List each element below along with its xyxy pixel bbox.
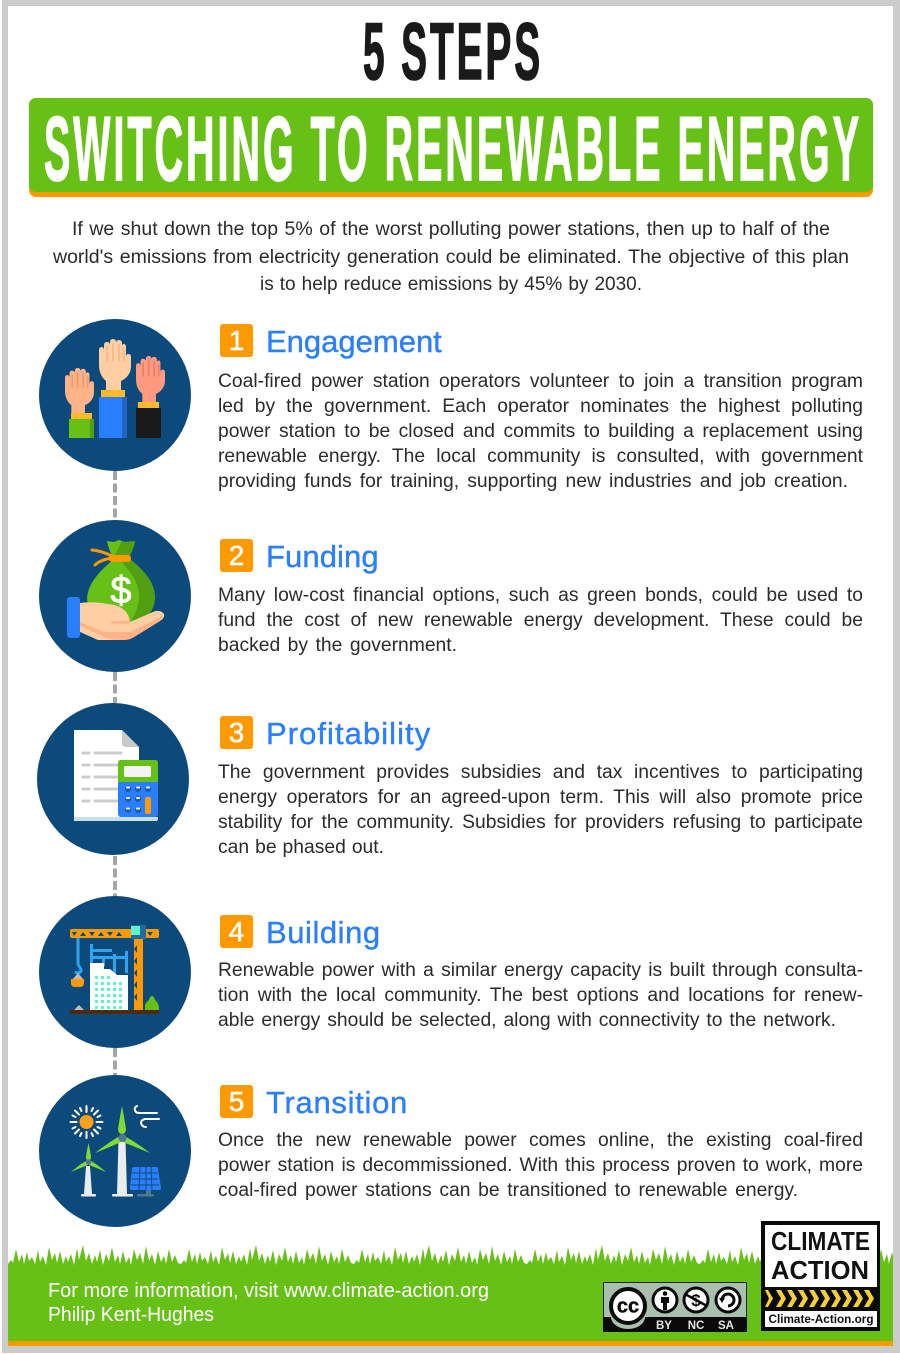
license labels: SA [718,1320,734,1332]
step 5 text: power station is decommissioned. With this process proven to work, more [218,1155,863,1176]
step 2 text [218,585,863,656]
by mark [653,1288,677,1312]
climate action logo: ACTION [771,1255,869,1285]
step 4 text: Renewable power with a similar energy capacity is built through consulta- [218,960,863,981]
icon: wind turbines, sun and solar panel [39,1075,191,1227]
text: 5 STEPS [363,7,543,97]
step 4 badge [220,915,253,948]
footer grass band [8,1245,893,1346]
step 2 heading: Funding [266,539,379,574]
step 1 text: Coal-fired power station operators volunteer to join a transition program [218,371,863,392]
step 1 heading: Engagement [266,324,442,359]
footer text: Philip Kent-Hughes [48,1304,214,1326]
intro text: is to help reduce emissions by 45% by 2030. [260,274,642,295]
icon: document and calculator [37,703,189,855]
icon: money bag on hand [39,520,191,672]
icon: raised hands [39,319,191,471]
step 3 text: energy operators for an agreed-upon term. This will also promote price [218,787,863,808]
panel: step 5 transition [39,1075,863,1227]
cc mark: cc [617,1296,639,1318]
step 5 text: coal-fired power stations can be transitioned to renewable energy. [218,1180,798,1201]
panel: step 1 engagement [39,319,863,492]
icon: construction crane [39,896,191,1048]
panel: step 2 funding [39,520,863,672]
license labels: BY [656,1320,672,1332]
step 1 text: led by the government. Each operator nominates the highest polluting [218,396,863,417]
step 3 text: can be phased out. [218,837,384,858]
footer text [48,1280,489,1326]
climate action logo [761,1221,880,1331]
step 2 badge [220,539,253,572]
cc mark [611,1289,645,1323]
step 5 text [218,1130,863,1201]
nc mark [684,1288,708,1312]
footer text: For more information, visit www.climate-action.org [48,1280,489,1302]
creative commons badge [603,1282,747,1332]
license labels: NC [688,1320,704,1332]
climate action logo: Climate-Action.org [768,1314,874,1326]
step 3 text: stability for the community. Subsidies for providers refusing to participate [218,812,863,833]
step 4 badge: 4 [229,916,244,947]
step 1 text: power station to be closed and commits to building a replacement using [218,421,863,442]
step 1 text: renewable energy. The local community is consulted, with government [218,446,863,467]
step 4 heading: Building [266,915,381,950]
step 1 badge: 1 [229,325,244,356]
step 4 text: able energy should be selected, along with connectivity to the network. [218,1010,836,1031]
panel: step 3 profitability [37,703,863,858]
step 2 badge: 2 [229,540,244,571]
license labels [656,1320,734,1332]
step 2 text: fund the cost of new renewable energy development. These could be [218,610,863,631]
step 3 badge: 3 [229,717,244,748]
climate action logo: CLIMATE [771,1226,870,1256]
step 1 text: providing funds for training, supporting new industries and job creation. [218,471,848,492]
step 3 text [218,762,863,858]
step 5 badge: 5 [229,1086,244,1117]
intro text: world's emissions from electricity generation could be eliminated. The objective of this plan [53,246,849,268]
step 4 text [218,960,863,1031]
icon: money bag on hand: $ [110,570,132,612]
step 3 badge [220,716,253,749]
step 2 text: backed by the government. [218,635,457,656]
intro text [53,218,849,295]
step 2 text: Many low-cost financial options, such as green bonds, could be used to [218,585,863,606]
sa mark [716,1288,740,1312]
step 1 badge [220,324,253,357]
nc mark: $ [691,1291,701,1310]
step 5 badge [220,1085,253,1118]
panel: step 4 building [39,896,863,1048]
step 3 heading: Profitability [266,716,431,751]
step 1 text [218,371,863,492]
intro text: If we shut down the top 5% of the worst polluting power stations, then up to half of the [72,218,830,240]
step 4 text: tion with the local community. The best options and locations for renew- [218,985,863,1006]
step 3 text: The government provides subsidies and tax incentives to participating [218,762,863,783]
step 5 text: Once the new renewable power comes online, the existing coal-fired [218,1130,863,1151]
step 5 heading: Transition [266,1085,408,1120]
